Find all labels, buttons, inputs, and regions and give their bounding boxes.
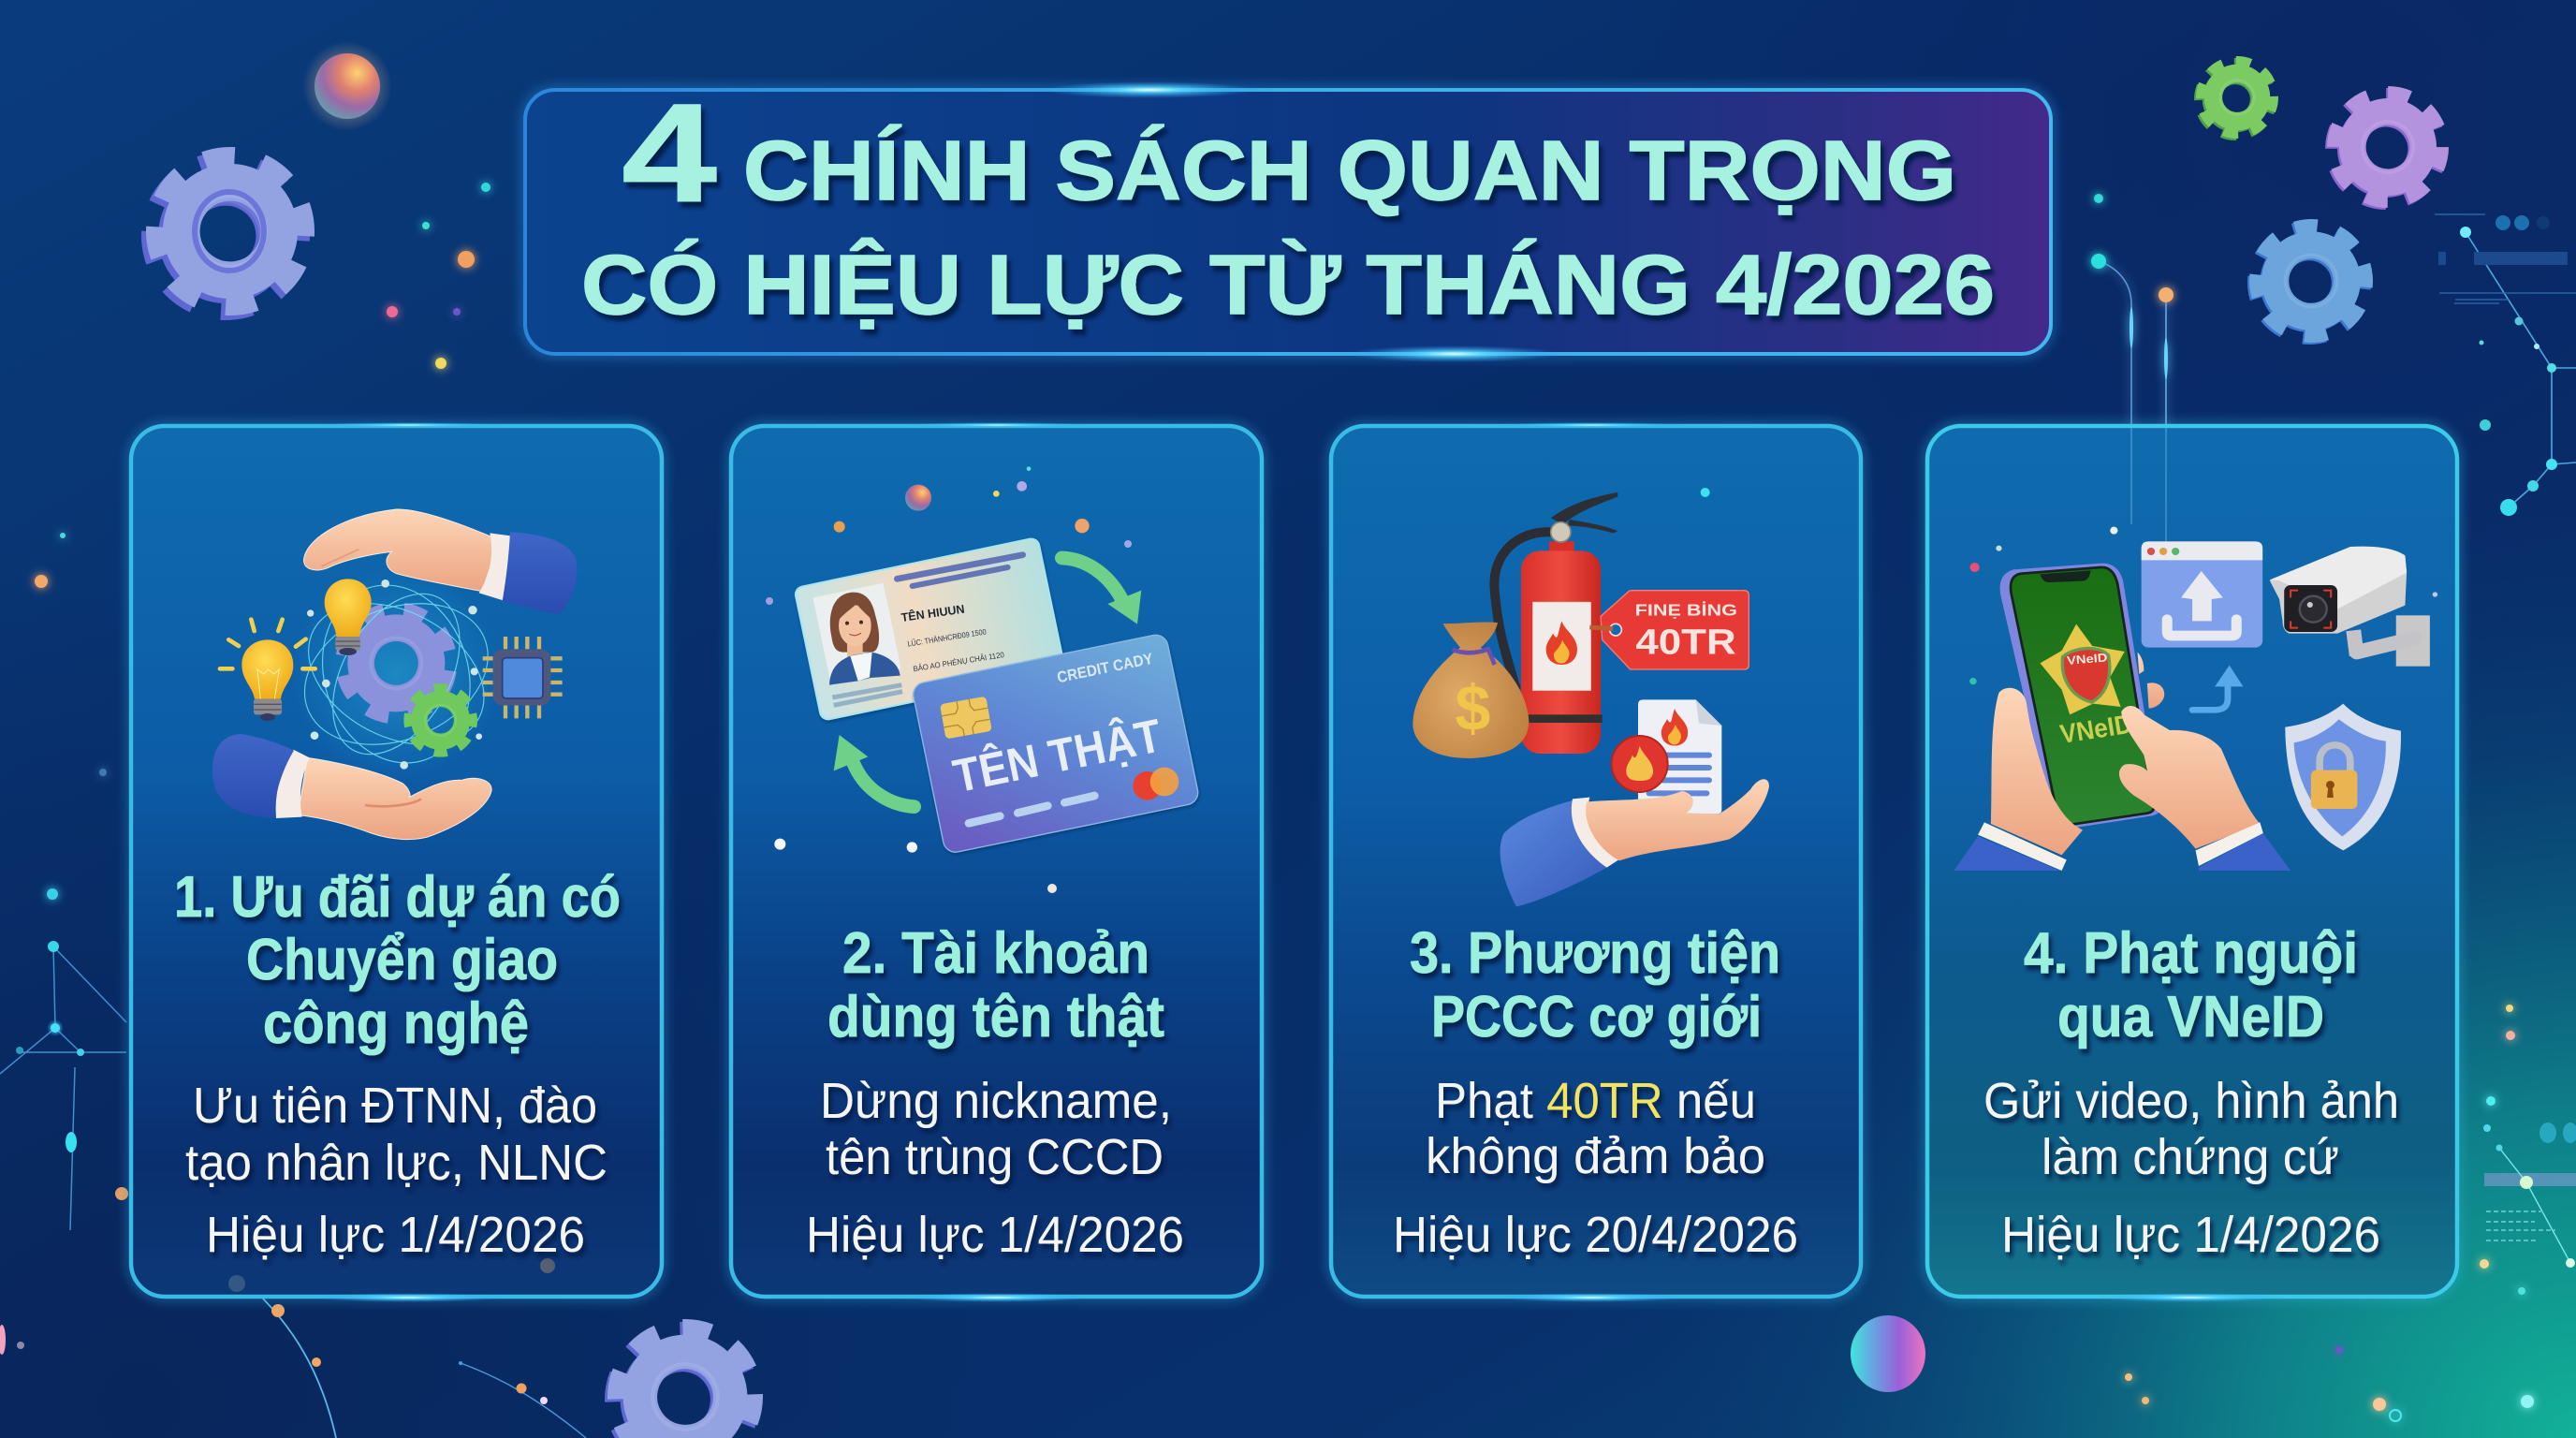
panel: card 4: [1927, 426, 2457, 1302]
portrait: [830, 593, 879, 653]
heading: card 3: [1410, 921, 1780, 1049]
text: card name: TÊN THẬT: [949, 709, 1166, 802]
heading: card 4: 4. Phạt nguội: [2024, 921, 2358, 986]
text: card 3 effective date: Hiệu lực 20/4/2026: [1393, 1207, 1798, 1263]
text: fine amount: 40TR: [1635, 622, 1736, 662]
panel: card 2: [731, 422, 1262, 1302]
heading: card 3: PCCC cơ giới: [1431, 985, 1762, 1049]
icon: light bulb on gear: [325, 579, 372, 655]
heading: card 1: công nghệ: [263, 991, 529, 1056]
panel: card 3: [1331, 422, 1861, 1302]
icon: fire coin: [1612, 736, 1668, 792]
circuit network lower right: [2483, 1123, 2576, 1268]
icon: gear purple top right: [2324, 85, 2450, 211]
icon: upload window: [2142, 541, 2262, 648]
text: card label: CREDIT CADY: [1056, 650, 1154, 686]
text: card 2 description: [820, 1073, 1172, 1185]
heading: title text: 4: [622, 74, 717, 231]
icon: sphere bottom right: [1851, 1315, 1925, 1392]
icon: upper hand: [304, 509, 577, 614]
circuit lines bottom left: [0, 1288, 586, 1438]
text: card 3 description: Phạt 40TR nếu: [1435, 1073, 1756, 1129]
decorative dots: [1969, 527, 2437, 684]
text: card 2 description: Dừng nickname,: [820, 1073, 1172, 1129]
arrow: top green arrow: [1061, 558, 1141, 624]
text: card 1 description: [185, 1078, 607, 1191]
heading: card 4: qua VNeID: [2057, 985, 2324, 1049]
arrow: bottom green arrow: [834, 735, 915, 807]
heading: card 2: dùng tên thật: [827, 985, 1164, 1049]
text: card 4 description: Gửi video, hình ảnh: [1983, 1073, 2399, 1129]
text: badge label: VNeID: [2066, 651, 2108, 668]
icon: sphere top left: [302, 41, 392, 131]
icon: gear green top right: [2194, 56, 2278, 140]
icon: fingers behind phone: [2138, 653, 2164, 709]
text: card 1 effective date: Hiệu lực 1/4/2026: [206, 1207, 585, 1263]
heading: card 1: Chuyển giao: [246, 928, 558, 992]
panel: title: [525, 74, 2051, 362]
circuit network left: [0, 941, 128, 1230]
decorative dots: [766, 466, 1132, 853]
text: card 3 description: [1426, 1073, 1765, 1184]
heading: title text: CÓ HIỆU LỰC TỪ THÁNG 4/2026: [581, 237, 1995, 332]
icon: hand: [1500, 779, 1769, 906]
illustration: ID card and credit card: [766, 466, 1200, 855]
icon: fine tag: [1589, 591, 1749, 669]
icon: light bulb left: [220, 620, 315, 721]
heading: title text: [581, 74, 1995, 332]
text: card 1 description: tạo nhân lực, NLNC: [185, 1135, 607, 1191]
text: dollar sign: $: [1455, 673, 1490, 744]
orbits: [284, 565, 509, 783]
illustration: hands, gears, light bulbs and chip: [212, 509, 577, 840]
icon: phone: [2000, 564, 2160, 829]
illustration: phone, upload window, camera and shield: [1954, 527, 2437, 871]
text: card 2 effective date: Hiệu lực 1/4/2026: [806, 1207, 1184, 1263]
icon: cyan dot: [1701, 488, 1710, 497]
icon: lower hand: [212, 734, 491, 840]
circuit lines top right: [2091, 194, 2174, 599]
heading: card 1: 1. Ưu đãi dự án có: [174, 865, 621, 930]
text: card 1 description: Ưu tiên ĐTNN, đào: [193, 1078, 597, 1134]
icon: document: [1638, 699, 1721, 814]
text: name on ID card: TÊN HIUUN: [900, 602, 965, 624]
icon: fire extinguisher: [1494, 492, 1617, 754]
text: fine tag label: FINẸ BİNG: [1635, 600, 1737, 619]
icon: money bag: [1412, 623, 1529, 758]
icon: large gear: [329, 596, 463, 730]
text: card 4 description: [1983, 1073, 2399, 1185]
icon: credit card: [911, 633, 1200, 855]
text: card 2 description: tên trùng CCCD: [826, 1129, 1164, 1185]
text: VNeID on screen: VNeID: [2058, 710, 2134, 750]
text: card 4 description: làm chứng cứ: [2042, 1129, 2339, 1185]
text: small lines on ID card: LŰC: THÀNHCRĐ09 1500: [907, 626, 988, 649]
icon: right hand: [2119, 706, 2291, 871]
heading: card 1: [174, 865, 621, 1056]
panel: card 1: [131, 422, 662, 1302]
text: small lines on ID card: BẢO AO PHÉNỤ CHẢI 1120: [913, 649, 1005, 673]
illustration: extinguisher, fine tag, money bag, document and hand: [1412, 488, 1769, 906]
text: small lines on ID card: [907, 626, 1005, 673]
icon: VNeID badge: [2041, 624, 2125, 714]
icon: gear bottom: [605, 1319, 763, 1438]
text: card 4 effective date: Hiệu lực 1/4/2026: [2001, 1207, 2380, 1263]
icon: shield with lock: [2285, 704, 2401, 850]
heading: title text: CHÍNH SÁCH QUAN TRỌNG: [743, 124, 1956, 218]
icon: green gear: [409, 689, 472, 752]
text: card 3 description: không đảm bảo: [1426, 1128, 1765, 1184]
icon: gear blue top right: [2252, 224, 2368, 340]
icon: gear top left: [144, 150, 312, 317]
icon: chip: [483, 637, 563, 718]
arrow: curved up arrow: [2192, 666, 2243, 710]
icon: network nodes: [307, 580, 482, 770]
heading: card 3: 3. Phương tiện: [1410, 921, 1780, 986]
heading: card 2: [827, 921, 1164, 1049]
circuit network right: [2435, 214, 2576, 516]
icon: ID card: [794, 537, 1065, 721]
icon: left hand: [1954, 688, 2083, 871]
heading: card 2: 2. Tài khoản: [842, 921, 1149, 986]
heading: card 4: [2024, 921, 2358, 1049]
icon: card chip: [940, 697, 992, 739]
icon: security camera: [2270, 547, 2430, 667]
